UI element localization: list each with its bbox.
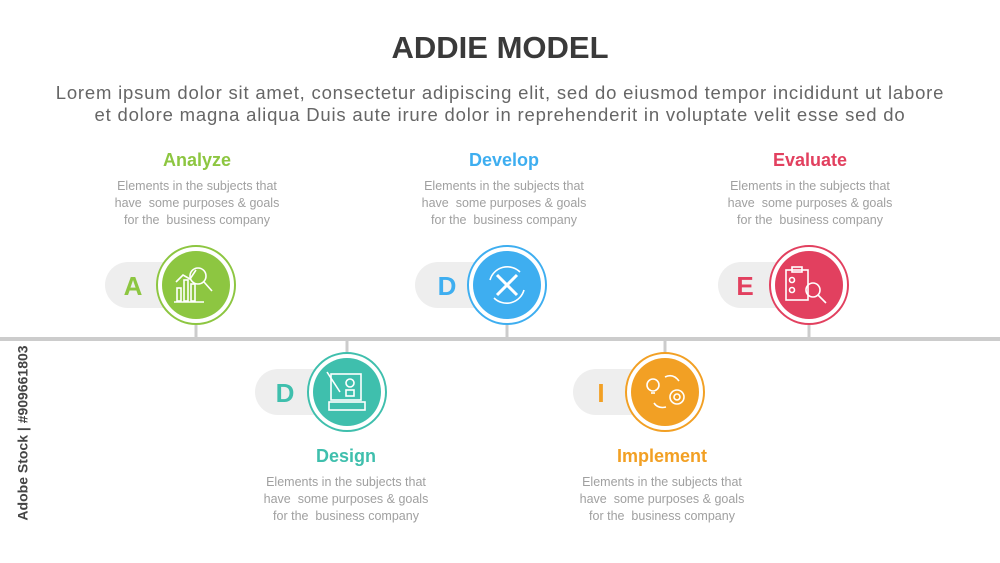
text: Develop (469, 150, 539, 170)
text: Analyze (163, 150, 231, 170)
text: Elements in the subjects that (582, 475, 742, 489)
text: have some purposes & goals (264, 492, 428, 506)
icon: tools cycle (490, 267, 524, 303)
icon: bulb gear (647, 376, 684, 408)
subtitle text: et dolore magna aliqua Duis aute irure dolor in reprehenderit in voluptate velit esse sed do (95, 104, 905, 125)
watermark side text: Adobe Stock | #909661803 (14, 345, 30, 521)
text: Implement (617, 446, 707, 466)
title: ADDIE MODEL (392, 30, 608, 65)
text: have some purposes & goals (115, 196, 279, 210)
text: Elements in the subjects that (117, 179, 277, 193)
text: Evaluate (773, 150, 847, 170)
step D: design circle (255, 353, 386, 431)
text: develop (422, 150, 586, 227)
text: for the business company (431, 213, 577, 227)
text: for the business company (273, 509, 419, 523)
subtitle text: Lorem ipsum dolor sit amet, consectetur adipiscing elit, sed do eiusmod tempor incididunt ut labore (56, 82, 944, 103)
text: implement (580, 446, 744, 523)
text: for the business company (124, 213, 270, 227)
step E: evaluate circle (718, 246, 848, 324)
step D: design circle: D (276, 378, 294, 408)
text: Elements in the subjects that (730, 179, 890, 193)
step D: develop circle: D (438, 271, 456, 301)
text: have some purposes & goals (580, 492, 744, 506)
step I: implement circle (573, 353, 704, 431)
step D: develop circle (415, 246, 546, 324)
text: Elements in the subjects that (424, 179, 584, 193)
text: analyze (115, 150, 279, 227)
step A: analyze circle (105, 246, 235, 324)
text: evaluate (728, 150, 892, 227)
text: have some purposes & goals (422, 196, 586, 210)
text: design (264, 446, 428, 523)
icon: chart magnifier (174, 268, 212, 302)
text: for the business company (737, 213, 883, 227)
step A: analyze circle: A (124, 271, 143, 301)
step I: implement circle: I (597, 378, 605, 408)
icon: blueprint (327, 372, 365, 410)
subtitle text (56, 82, 944, 125)
text: for the business company (589, 509, 735, 523)
icon: clipboard magnifier (786, 267, 826, 303)
step E: evaluate circle: E (736, 271, 754, 301)
text: have some purposes & goals (728, 196, 892, 210)
text: Design (316, 446, 376, 466)
text: Elements in the subjects that (266, 475, 426, 489)
